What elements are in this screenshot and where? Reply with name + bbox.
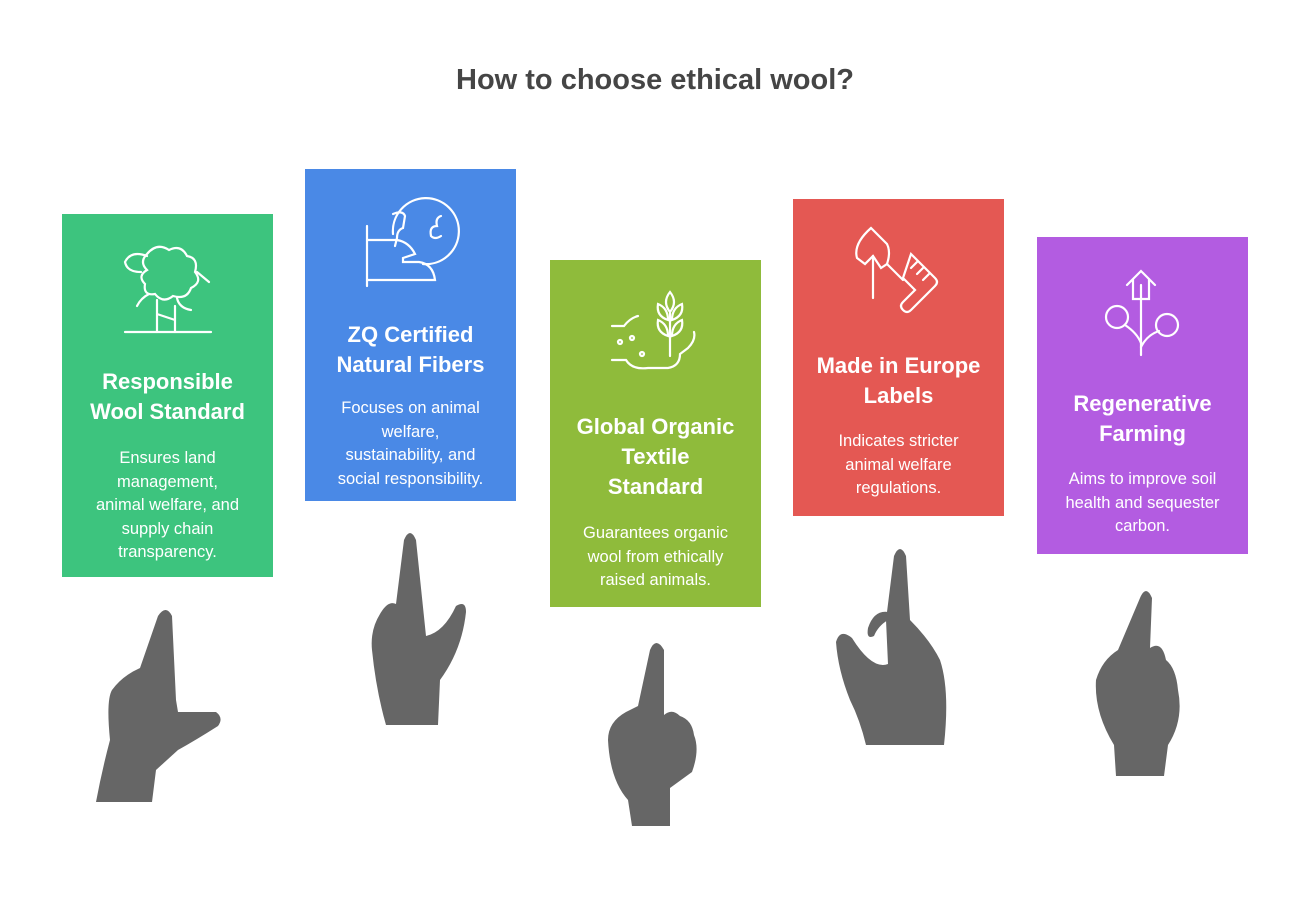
panel: Made in Europe Labels	[793, 199, 1004, 516]
text: social responsibility.	[338, 470, 483, 488]
panel: Global Organic Textile Standard	[550, 260, 761, 607]
heading: Farming	[1099, 421, 1186, 446]
icon: wheat hand	[610, 290, 696, 370]
text	[338, 399, 483, 488]
text: Ensures land	[119, 449, 216, 467]
heading: Natural Fibers	[337, 352, 484, 377]
heading: Regenerative	[1073, 391, 1212, 416]
text: raised animals.	[600, 571, 711, 589]
heading: Textile	[621, 444, 690, 469]
icon: hand 5	[1096, 591, 1180, 776]
text: supply chain	[122, 520, 213, 538]
text: regulations.	[856, 479, 941, 497]
icon: plant with house	[1104, 270, 1180, 356]
text: management,	[117, 472, 218, 490]
icon: animal with brush	[855, 226, 938, 314]
heading: Wool Standard	[90, 399, 245, 424]
text: Guarantees organic	[583, 524, 728, 542]
text: health and sequester	[1065, 494, 1220, 512]
heading: Responsible	[102, 369, 233, 394]
panel: ZQ Certified Natural Fibers	[305, 169, 516, 501]
heading: Global Organic	[577, 414, 734, 439]
heading	[90, 369, 245, 424]
text: carbon.	[1115, 517, 1170, 535]
icon: hand 4	[836, 549, 946, 745]
text: transparency.	[118, 543, 217, 561]
icon: hand 2	[372, 533, 466, 725]
text: Aims to improve soil	[1069, 470, 1216, 488]
heading	[1073, 391, 1212, 446]
heading: Standard	[608, 474, 703, 499]
heading: ZQ Certified	[348, 322, 473, 347]
icon: hand 3	[608, 643, 697, 826]
text	[96, 449, 239, 561]
text: animal welfare, and	[96, 496, 239, 514]
text	[1065, 470, 1220, 535]
icon: hand 1	[96, 610, 221, 802]
heading	[817, 353, 980, 408]
text: wool from ethically	[588, 548, 723, 566]
heading: Labels	[864, 383, 933, 408]
text: sustainability, and	[346, 446, 475, 464]
icon: globe hand	[366, 197, 460, 288]
text: Focuses on animal	[341, 399, 480, 417]
text	[583, 524, 728, 589]
heading	[337, 322, 484, 377]
text	[838, 432, 959, 497]
text: welfare,	[382, 422, 439, 440]
panel: Regenerative Farming	[1037, 237, 1248, 554]
heading	[577, 414, 734, 499]
heading: Made in Europe	[817, 353, 980, 378]
icon: sheep	[124, 246, 212, 334]
text: Indicates stricter	[838, 432, 959, 450]
title: How to choose ethical wool?	[456, 64, 854, 96]
text: animal welfare	[845, 456, 952, 474]
panel: Responsible Wool Standard	[62, 214, 273, 577]
